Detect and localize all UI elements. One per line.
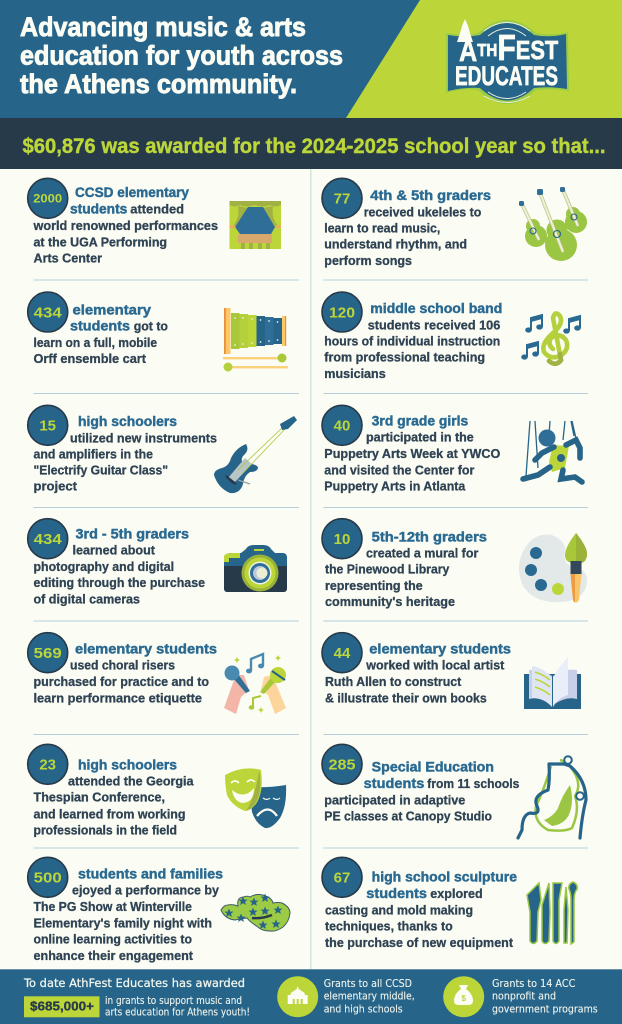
item: 77 4th & 5th graders — [322, 178, 587, 268]
number badge: 44: 44 — [334, 645, 351, 662]
number badge: 2000: 2000 — [33, 194, 62, 206]
text: ukeleles: 4th & 5th graders — [370, 188, 491, 203]
text: Electrify Guitar Class: "Electrify Guitar Class" — [34, 463, 168, 478]
text: Thespian Conference: professionals in the field — [34, 822, 177, 837]
text: Pinewood Library mural: community's heritage — [325, 594, 455, 609]
item: 10 5th-12th graders — [322, 519, 587, 609]
text: Electrify Guitar Class: high schoolers — [78, 414, 177, 429]
text: Thespian Conference: high schoolers — [78, 757, 177, 772]
text: photography — [34, 526, 205, 606]
text: Puppetry Arts: Puppetry Arts in Atlanta — [324, 478, 466, 493]
icon: school — [277, 976, 318, 1017]
text: Thespian Conference: and learned from working — [34, 806, 186, 821]
item: 120 middle school band — [322, 292, 581, 381]
number badge: 40: 40 — [334, 418, 350, 434]
title: education for youth across — [20, 40, 343, 70]
text: Orff cart: learn on a full, mobile — [34, 335, 157, 350]
icon: stage — [230, 201, 281, 249]
text: Orff cart: got to — [134, 319, 168, 334]
text: band instruction: hours of individual instruction — [324, 334, 500, 349]
logo: AthFest Educates: TH — [477, 40, 497, 60]
number badge: 120: 120 — [329, 304, 355, 322]
item: 2000 CCSD students — [28, 178, 281, 266]
text: Pinewood Library mural: the Pinewood Library — [325, 562, 450, 577]
footer: total awarded: in grants to support music and — [105, 995, 242, 1007]
text: performances: Arts Center — [34, 251, 102, 266]
logo: AthFest Educates: F — [497, 29, 516, 69]
number badge: 434: 434 — [34, 304, 62, 322]
number badge: 500: 500 — [34, 870, 62, 886]
text: Ruth Allen books: Ruth Allen to construct — [325, 674, 462, 689]
logo: AthFest Educates: EST — [516, 36, 559, 65]
header banner — [0, 0, 622, 118]
text: Canopy Studio — [324, 760, 519, 824]
footer: ACC grants: government programs — [492, 1003, 598, 1015]
number badge: 23 — [28, 744, 68, 784]
text: casting and mold making — [325, 870, 517, 950]
text: ukeleles: understand rhythm, and — [324, 237, 467, 252]
footer: CCSD grants: and high schools — [324, 1003, 403, 1015]
text: PG Show: The PG Show at Winterville — [34, 899, 192, 914]
text: performances — [33, 185, 218, 266]
footer: CCSD grants: Grants to all CCSD — [324, 978, 412, 990]
award subhead band — [0, 118, 622, 169]
text: choral risers: used choral risers — [70, 658, 175, 673]
icon: money bag — [443, 976, 484, 1017]
item: 434 elementary students — [28, 292, 288, 372]
text: Thespian Conference: Thespian Conference, — [34, 790, 165, 805]
item: 40 3rd grade girls — [322, 405, 582, 493]
item: 15 high schoolers — [28, 405, 297, 494]
icon: camera — [224, 545, 287, 592]
text: Puppetry Arts: 3rd grade girls — [372, 413, 469, 428]
text: Canopy Studio: from 11 schools — [427, 776, 519, 791]
number badge: 77 — [322, 178, 362, 218]
number badge: 120 — [322, 292, 362, 332]
text: Orff cart: students — [70, 319, 130, 334]
text: Ruth Allen books: worked with local artist — [365, 658, 505, 673]
text: Orff cart: Orff ensemble cart — [34, 351, 147, 366]
logo: AthFest Educates: EDUCATES — [455, 61, 558, 91]
footer: total awarded: $685,000+ — [30, 1000, 94, 1014]
text: photography: 3rd - 5th graders — [76, 526, 189, 541]
icon: star cowboy hat — [221, 894, 290, 931]
text: ukeleles: received ukeleles to — [364, 204, 481, 219]
number badge: 285 — [322, 744, 362, 784]
icon: treble clef and notes — [521, 313, 581, 364]
icon: palette and brush — [519, 533, 587, 602]
icon: aerial silks — [518, 756, 586, 838]
number badge: 40 — [322, 405, 362, 445]
text: Canopy Studio: students — [364, 776, 425, 791]
footer: ACC grants: Grants to 14 ACC — [492, 978, 575, 990]
icon: electric guitar — [214, 416, 297, 493]
item: 285 Special Education students — [322, 744, 586, 838]
text: performances: students — [70, 202, 128, 217]
text: casting and mold making: casting and mold making — [325, 902, 473, 917]
text: Pinewood Library mural: 5th-12th graders — [372, 529, 487, 544]
footer: ACC grants: nonprofit and — [492, 991, 556, 1003]
text: photography: of digital cameras — [34, 591, 140, 606]
text: photography: photography and digital — [34, 559, 174, 574]
text: PG Show: Elementary's family night with — [34, 915, 212, 930]
text: PG Show: online learning activities to — [34, 932, 192, 947]
text: choral risers — [34, 641, 217, 705]
text: Pinewood Library mural — [325, 529, 487, 609]
number badge: 23: 23 — [39, 756, 56, 774]
text: performances: world renowned performances — [33, 218, 218, 233]
text: photography: learned about — [72, 543, 156, 558]
title — [20, 12, 343, 99]
item: 44 elementary students — [322, 633, 581, 709]
number badge: 67: 67 — [334, 870, 350, 886]
text: ukeleles: perform songs — [324, 253, 412, 268]
number badge: 44 — [322, 633, 362, 673]
text: PG Show: enhance their engagement — [34, 948, 194, 963]
number badge: 67 — [322, 857, 362, 897]
text: casting and mold making: students — [366, 886, 427, 901]
text: choral risers: learn performance etiquette — [34, 690, 202, 705]
text: casting and mold making: the purchase of new equipment — [325, 935, 514, 950]
item: 500 students and families — [28, 857, 290, 963]
text: band instruction: from professional teaching — [324, 350, 485, 365]
item: 67 high school sculpture students — [322, 857, 577, 950]
text: band instruction: middle school band — [370, 301, 502, 316]
text: Ruth Allen books: & illustrate their own books — [325, 690, 487, 705]
text: Canopy Studio: Special Education — [372, 760, 494, 775]
text: Electrify Guitar Class: utilized new instruments — [70, 430, 217, 445]
title: the Athens community. — [20, 69, 297, 99]
number badge: 15: 15 — [39, 418, 56, 434]
text: Orff cart — [34, 303, 168, 366]
text: band instruction: students received 106 — [368, 317, 500, 332]
text: band instruction — [324, 301, 502, 381]
icon: marionette — [523, 421, 582, 482]
text: photography: editing through the purchase — [34, 575, 205, 590]
footer band — [0, 969, 622, 1024]
text: PG Show — [34, 866, 223, 963]
text: band instruction: musicians — [324, 366, 386, 381]
number badge: 2000 — [28, 178, 68, 218]
footer: CCSD grants: elementary middle, — [324, 991, 415, 1003]
text: Electrify Guitar Class: project — [34, 479, 78, 494]
text: Puppetry Arts: Puppetry Arts Week at YWCO — [324, 446, 500, 461]
item: 569 elementary students — [28, 633, 286, 714]
icon: singers with microphones — [224, 654, 286, 714]
icon: sculpting tools — [527, 882, 577, 944]
number badge: 15 — [28, 405, 68, 445]
text: Ruth Allen books — [325, 641, 511, 705]
text: casting and mold making: techniques, thanks to — [325, 919, 453, 934]
text: casting and mold making: high school sculpture — [372, 870, 517, 885]
text: ukeleles: learn to read music, — [324, 220, 440, 235]
logo: AthFest Educates — [446, 19, 569, 104]
icon: theater masks — [225, 768, 286, 828]
icon: ukuleles — [519, 187, 587, 261]
number badge: 569: 569 — [34, 645, 62, 662]
text: Orff cart: elementary — [72, 303, 151, 318]
number badge: 500 — [28, 857, 68, 897]
text: Puppetry Arts: and visited the Center for — [324, 462, 474, 477]
text: choral risers: purchased for practice and to — [34, 674, 209, 689]
text: ukeleles — [324, 188, 491, 268]
text: performances: at the UGA Performing — [34, 234, 167, 249]
text: Thespian Conference — [34, 757, 194, 837]
footer: CCSD grants — [324, 978, 415, 1015]
number badge: 10 — [322, 519, 362, 559]
item: 434 3rd - 5th graders — [28, 519, 287, 606]
text: Electrify Guitar Class: and amplifiers in the — [34, 446, 153, 461]
logo: AthFest Educates: A — [459, 34, 477, 67]
text: Canopy Studio: PE classes at Canopy Studio — [324, 809, 492, 824]
text: PG Show: ejoyed a performance by — [72, 883, 220, 898]
item: 23 high schoolers — [28, 744, 286, 837]
text: Thespian Conference: attended the Georgia — [68, 774, 194, 789]
text: PG Show: students and families — [78, 866, 223, 881]
title: Advancing music & arts — [20, 12, 306, 42]
footer: ACC grants — [492, 978, 598, 1015]
icon: money bag: $ — [461, 994, 466, 1003]
number badge: 434 — [28, 292, 68, 332]
text: Canopy Studio: participated in adaptive — [324, 792, 465, 807]
number badge: 434 — [28, 519, 68, 559]
number badge: 285: 285 — [328, 756, 356, 774]
text: choral risers: elementary students — [75, 641, 217, 656]
text: Pinewood Library mural: created a mural for — [366, 546, 478, 561]
number badge: 569 — [28, 633, 68, 673]
text: Pinewood Library mural: representing the — [325, 578, 423, 593]
footer: total awarded — [23, 976, 250, 1019]
icon: xylophone — [223, 308, 288, 372]
text: performances: attended — [130, 202, 184, 217]
footer: total awarded: arts education for Athens youth! — [105, 1007, 250, 1019]
text: Electrify Guitar Class — [34, 414, 217, 494]
icon: open book — [524, 657, 581, 709]
text: casting and mold making: explored — [430, 886, 483, 901]
text: Puppetry Arts: participated in the — [366, 430, 474, 445]
text: performances: CCSD elementary — [75, 185, 189, 200]
text: Puppetry Arts — [324, 413, 500, 493]
footer: total awarded: To date AthFest Educates has awarded — [23, 976, 245, 990]
award subhead band: $60,876 was awarded for the 2024-2025 school year so that... — [22, 135, 606, 158]
number badge: 434: 434 — [34, 531, 62, 548]
text: Ruth Allen books: elementary students — [369, 641, 511, 656]
number badge: 77: 77 — [334, 190, 350, 208]
number badge: 10: 10 — [334, 531, 350, 548]
